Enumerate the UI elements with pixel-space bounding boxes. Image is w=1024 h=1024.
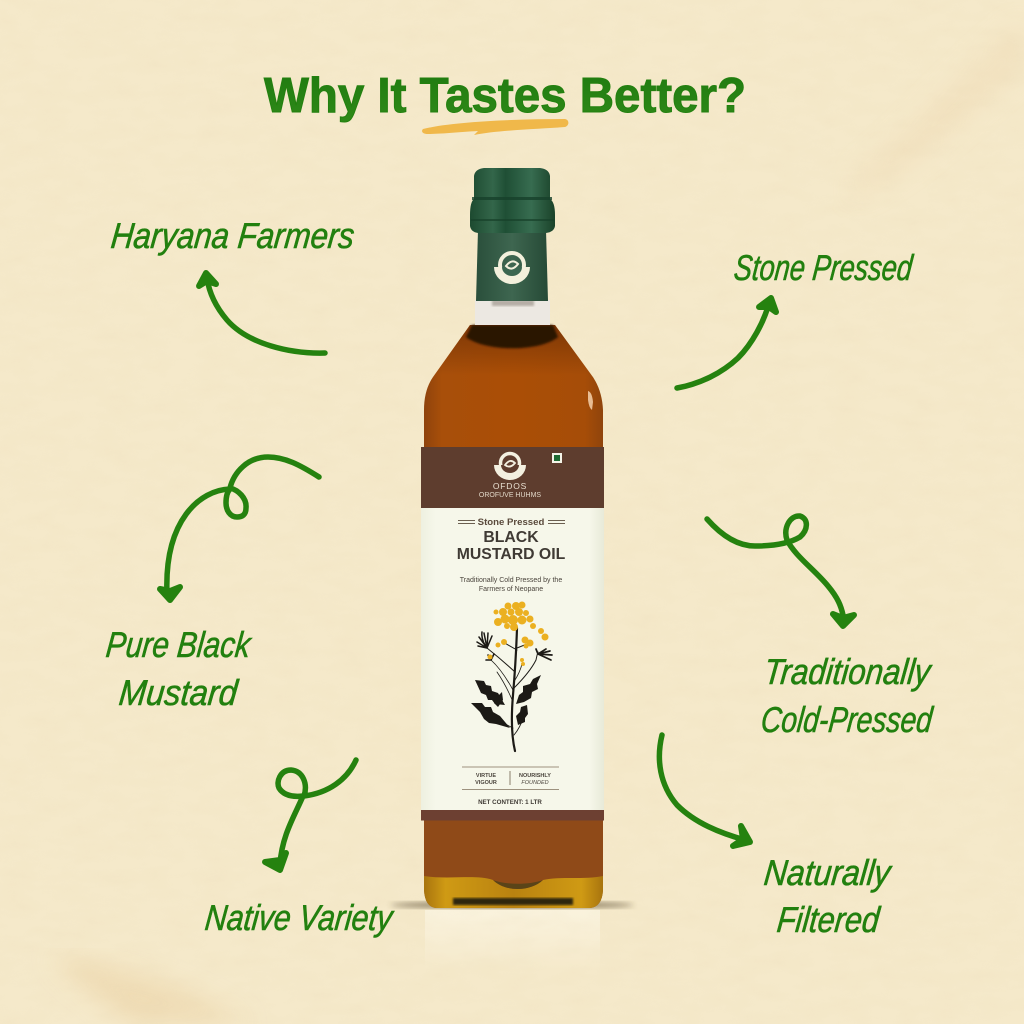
neck logo [494,253,530,284]
amber base [424,876,603,908]
clear glass neck band [475,300,550,325]
label bottom band [421,810,604,820]
callout: Traditionally Cold-Pressed [707,516,936,740]
callout: Pure Black Mustard: Mustard [117,672,241,713]
veg mark [552,453,562,463]
callout: Pure Black Mustard: Pure Black [104,624,254,665]
flowers [488,602,548,666]
label logo [494,454,526,480]
callout: Stone Pressed: Stone Pressed [732,247,916,288]
arrow [659,735,750,846]
callout: Traditionally Cold-Pressed: Cold-Pressed [759,699,936,740]
label spec table: VIGOUR [475,780,497,786]
tagline [460,577,562,593]
net content: NET CONTENT: 1 LTR [478,799,542,806]
highlight [588,391,593,410]
callout: Haryana Farmers: Haryana Farmers [109,215,356,256]
brand text: OFDOS [493,481,527,491]
callout: Traditionally Cold-Pressed: Traditionally [762,651,934,692]
product name: BLACK [483,529,539,546]
callout: Native Variety [203,760,396,938]
mustard plant illustration [471,602,552,751]
product name: MUSTARD OIL [457,546,566,563]
tagline: Farmers of Neopane [479,586,543,593]
label spec table: NOURISHLY [519,773,551,779]
bottle [390,168,634,908]
bottle: OROFUVE HUHMS [479,492,541,499]
arrow [707,516,854,626]
callout: Naturally Filtered [659,735,894,940]
callout: Naturally Filtered: Filtered [775,899,883,940]
arrow [199,273,325,353]
leaves [471,675,541,728]
callout: Haryana Farmers [109,215,356,353]
tagline: Traditionally Cold Pressed by the [460,577,562,584]
label spec table: FOUNDED [521,780,549,786]
oil upper body [424,325,603,450]
lower oil [424,820,603,908]
label white panel [421,508,604,812]
product name [457,529,566,563]
arrow [265,760,356,870]
label spec table: VIRTUE [476,773,496,779]
arrow [677,298,776,388]
neck sleeve [476,230,548,301]
callout: Stone Pressed [677,247,916,388]
stone pressed: Stone Pressed [478,517,544,528]
callout: Native Variety: Native Variety [203,897,396,938]
dark oil top [466,325,558,348]
cap [470,168,555,233]
callout: Pure Black Mustard [104,457,319,713]
callout: Naturally Filtered: Naturally [762,852,894,893]
bottle shadow [390,902,634,908]
stone pressed [458,517,565,528]
title: Why It Tastes Better? [264,69,746,123]
label spec table [462,767,559,790]
arrow [160,457,319,600]
title underline [422,119,568,135]
label brown band [421,447,604,508]
